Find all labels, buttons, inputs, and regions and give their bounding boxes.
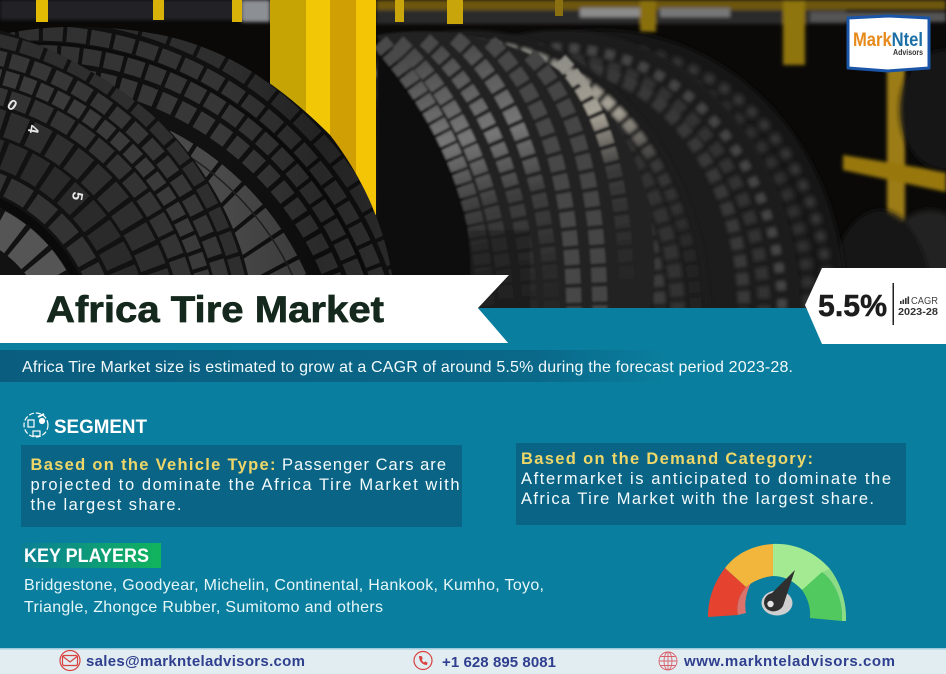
- heading: key players: KEY PLAYERS: [24, 546, 149, 567]
- gauge needle: [764, 570, 795, 611]
- panel: vehicle type: [21, 445, 462, 527]
- tire sidewall marks: [8, 100, 84, 200]
- CAGR period: 2023-28: [898, 306, 938, 318]
- tire 5: [516, 30, 790, 308]
- teal ribbon notch: [478, 308, 822, 344]
- CAGR value: 5.5%: [818, 288, 887, 323]
- logo: MarkNtel Advisors: Advisors: [893, 48, 923, 57]
- gauge hub: [762, 590, 792, 616]
- CAGR badge: [805, 268, 946, 344]
- far background tires: [841, 52, 946, 268]
- tire sidewall marks: 5: [68, 190, 86, 202]
- panel: demand category: Based on the Demand Category:: [521, 450, 813, 468]
- panel: vehicle type: the largest share.: [30, 496, 182, 514]
- title: Africa Tire Market: [46, 288, 385, 330]
- photo: tires on a yellow rack: [0, 0, 946, 310]
- teal background: [0, 300, 946, 674]
- heading: segment: SEGMENT: [54, 417, 147, 438]
- tire 4: [376, 30, 694, 308]
- logo: MarkNtel Advisors: [848, 16, 929, 71]
- panel: demand category: Aftermarket is anticipated to dominate the: [521, 470, 891, 488]
- icon: email: [60, 650, 80, 670]
- yellow post: [270, 0, 376, 215]
- gauge: [708, 544, 846, 621]
- tire sidewall marks: 4: [24, 124, 42, 135]
- phone number: +1 628 895 8081: [442, 654, 556, 671]
- icon: globe: [659, 652, 677, 670]
- left front tire: [0, 30, 248, 275]
- summary strip: Africa Tire Market size is estimated to grow at a CAGR of around 5.5% during the forecast period 2023-28.: [22, 359, 793, 376]
- rack background: [0, 0, 946, 223]
- icon: segment globe: [24, 413, 48, 437]
- yellow stubs: [36, 0, 563, 24]
- footer bar: [0, 648, 946, 674]
- panel: vehicle type: projected to dominate the Africa Tire Market with: [30, 476, 460, 494]
- right tire group: [376, 29, 839, 310]
- panel: demand category: [516, 443, 906, 525]
- panel: demand category: Africa Tire Market with the largest share.: [521, 490, 874, 508]
- title banner: [0, 275, 509, 343]
- logo: MarkNtel Advisors: MarkNtel: [853, 30, 923, 51]
- tire sidewall marks: 0: [4, 96, 20, 115]
- tire 6: [594, 30, 839, 310]
- email address: sales@marknteladvisors.com: [86, 653, 305, 670]
- tire 3: [376, 31, 655, 310]
- summary strip: [0, 350, 793, 382]
- text: key players list: Bridgestone, Goodyear, Michelin, Continental, Hankook, Kumho, Toyo,: [24, 577, 544, 594]
- text: key players list: [24, 577, 544, 616]
- text: key players list: Triangle, Zhongce Rubber, Sumitomo and others: [24, 599, 383, 616]
- website: www.marknteladvisors.com: [683, 653, 895, 670]
- panel: vehicle type: Passenger Cars are: [282, 456, 446, 474]
- CAGR label: CAGR: [911, 296, 938, 307]
- panel: vehicle type: Based on the Vehicle Type:: [30, 456, 276, 474]
- icon: phone: [414, 652, 432, 670]
- left back tire: [9, 27, 392, 275]
- icon: small bar chart: [900, 296, 909, 304]
